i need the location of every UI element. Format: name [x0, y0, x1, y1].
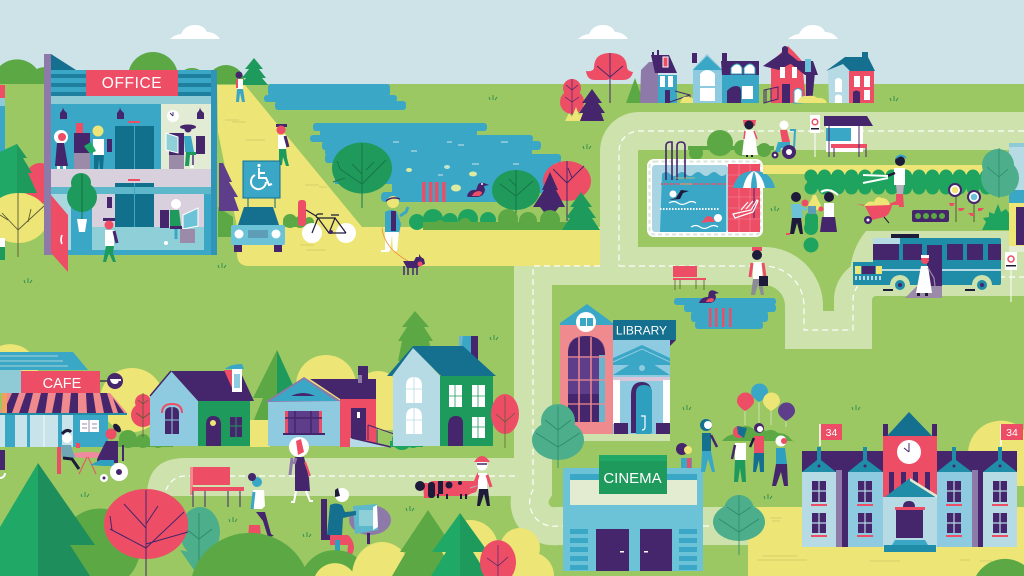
school flag right — [1001, 424, 1023, 446]
road network — [147, 131, 1024, 526]
upper lake — [264, 84, 406, 110]
man walking out of office — [103, 218, 117, 262]
yellow shrubs by cinema — [500, 528, 554, 576]
big pine bottom left — [0, 463, 95, 576]
bike post — [298, 200, 306, 226]
yellow garden path — [763, 165, 995, 174]
house three — [387, 336, 496, 446]
sun lounger — [733, 200, 758, 218]
tree: red by lake — [543, 161, 591, 221]
house one — [150, 364, 254, 446]
pond near library — [674, 298, 776, 329]
balloons — [737, 384, 795, 427]
window — [230, 417, 242, 437]
group of children — [676, 419, 788, 486]
bus stop sign right — [1005, 252, 1017, 302]
wheelchair user top — [772, 120, 796, 159]
bushes beneath balloons — [722, 426, 795, 442]
dog on lead — [403, 254, 425, 275]
dormer — [224, 364, 244, 392]
school windows — [812, 481, 1007, 533]
teal tree right — [981, 148, 1019, 198]
right edge building — [1009, 143, 1024, 252]
woman with shopping bag — [248, 473, 274, 539]
green pine by lake — [562, 192, 600, 230]
topiary bush — [804, 212, 818, 252]
clouds — [170, 25, 838, 39]
office door — [51, 195, 68, 272]
cafe sign: CAFE — [43, 376, 82, 392]
lake reeds — [422, 182, 446, 202]
bicycle — [302, 210, 356, 243]
dog walker and assistance dog — [415, 456, 491, 506]
top terrace house 1 — [640, 50, 695, 103]
green hills bottom — [192, 533, 369, 576]
school flag right: 34 — [1006, 427, 1018, 439]
green pine bottom — [431, 513, 488, 576]
cafe cup sign — [100, 373, 123, 389]
man at outdoor laptop — [321, 488, 391, 558]
parasol — [733, 171, 775, 218]
left edge wheelchair person — [0, 450, 5, 478]
red tree behind office — [26, 163, 54, 204]
distant hills — [0, 52, 245, 84]
green pine top — [626, 78, 644, 103]
purple pine by office — [219, 163, 239, 211]
top terrace house 3 — [763, 46, 827, 103]
teal tree by library — [532, 404, 584, 468]
yellow plaza — [748, 507, 1024, 576]
duck on lake — [467, 183, 489, 197]
flowers — [948, 183, 984, 222]
office sign: OFFICE — [102, 75, 162, 92]
duck on pond — [699, 290, 719, 303]
school — [802, 412, 1017, 552]
cinema sign: CINEMA — [603, 470, 662, 487]
library door — [631, 382, 652, 441]
child with wheelchair behind cinema — [676, 443, 692, 468]
teal tree by plaza — [713, 495, 765, 555]
upstairs desk worker — [166, 124, 205, 169]
swimming pool — [647, 142, 775, 237]
elderly passenger with stick — [916, 255, 936, 296]
house two — [265, 366, 394, 447]
woman in purple coat — [289, 437, 313, 502]
house two door — [351, 408, 366, 440]
accessible parking sign — [243, 161, 280, 208]
yellow shrubs behind bottom pines — [442, 520, 533, 576]
yellow tree — [0, 193, 48, 257]
wheelchair user at cafe — [90, 422, 128, 482]
red tree right of houses — [491, 394, 519, 448]
cafe awning — [0, 393, 127, 415]
red tree by cafe — [131, 393, 155, 437]
park bench bottom — [190, 467, 244, 507]
mound behind big pine — [60, 508, 140, 576]
woman at reception — [54, 130, 68, 169]
lake details: lily pads and ripples — [393, 142, 519, 192]
school gables — [802, 447, 1017, 472]
house three windows — [406, 377, 485, 438]
wheelbarrow — [856, 197, 892, 224]
grass tufts — [24, 95, 898, 537]
house three door — [448, 416, 463, 446]
lifts — [107, 121, 154, 227]
plaza ground marks — [225, 120, 992, 561]
woman in white dress — [742, 120, 758, 157]
potted plant — [67, 173, 97, 232]
purple pine — [533, 172, 565, 217]
road centre dashes — [166, 131, 1024, 526]
bush by ramp — [390, 430, 423, 450]
yellow footpath — [217, 85, 600, 266]
cafe — [0, 352, 127, 447]
parked car — [231, 207, 285, 252]
reception desk — [74, 123, 90, 169]
small person at left edge — [0, 238, 5, 260]
clock tower — [883, 412, 937, 505]
top terrace house 2 — [692, 53, 759, 103]
pond reeds — [709, 308, 732, 327]
yellow shrubs bottom — [315, 542, 412, 576]
pendant lights — [60, 107, 204, 119]
hedges by lake — [409, 209, 573, 230]
sky — [0, 0, 1024, 90]
library pediment — [613, 345, 670, 375]
spiky bush — [982, 204, 1009, 230]
office building — [44, 54, 217, 272]
door — [206, 416, 221, 446]
bushes behind pool — [688, 130, 774, 160]
library arched window — [567, 336, 606, 422]
main lake — [310, 123, 561, 202]
yellow spiky shrub — [565, 107, 590, 121]
couple with vegetables — [786, 190, 838, 235]
yellow shrubs behind cafe — [0, 344, 164, 432]
mid green pine bottom — [392, 510, 456, 576]
bus — [853, 234, 1001, 298]
yellow shrub right — [968, 421, 1024, 486]
tree: green by lake — [332, 142, 392, 208]
downstairs desk worker — [160, 199, 198, 245]
cafe table and customers — [57, 430, 105, 474]
hedge — [807, 175, 990, 189]
pine left of office — [0, 144, 37, 204]
library book badge — [576, 312, 596, 332]
red tree bottom — [104, 489, 188, 576]
swimmers — [669, 190, 696, 204]
pine behind house three — [398, 311, 433, 361]
tree: green round right of lake — [492, 170, 540, 215]
access ramp — [350, 425, 394, 447]
bushes right of cafe — [118, 430, 173, 448]
person on path far — [236, 72, 245, 102]
bus stop sign top — [810, 115, 820, 157]
school flag left: 34 — [826, 427, 837, 439]
school flag left — [820, 424, 842, 446]
arched window — [162, 404, 182, 434]
wall clock — [167, 110, 179, 122]
top terrace house 4 — [826, 52, 875, 103]
bushes beside the car — [218, 207, 314, 237]
house two bay window — [283, 411, 325, 435]
red tree bottom right — [480, 540, 516, 576]
person walking on path — [276, 124, 289, 166]
teal tree bottom — [180, 507, 220, 570]
green mound plaza corner — [976, 559, 1024, 576]
man with guide dog — [381, 196, 408, 261]
red ball tree top — [560, 79, 584, 115]
purple pine top — [579, 89, 605, 121]
gardener with shears — [863, 156, 906, 207]
bus shelter — [824, 116, 873, 157]
office sign — [86, 70, 178, 96]
cinema — [563, 455, 703, 571]
park bench top — [673, 266, 706, 290]
left edge building — [0, 85, 5, 152]
red parasol tree — [586, 53, 633, 103]
pine behind house one — [253, 350, 296, 422]
yellow shrubs behind houses — [250, 355, 400, 447]
man at reception — [84, 126, 104, 169]
vegetable bed — [912, 210, 949, 222]
pine on horizon — [240, 58, 268, 85]
school porch — [883, 478, 937, 552]
man with briefcase — [750, 247, 768, 295]
library banner: LIBRARY — [616, 324, 667, 338]
library — [560, 304, 676, 441]
